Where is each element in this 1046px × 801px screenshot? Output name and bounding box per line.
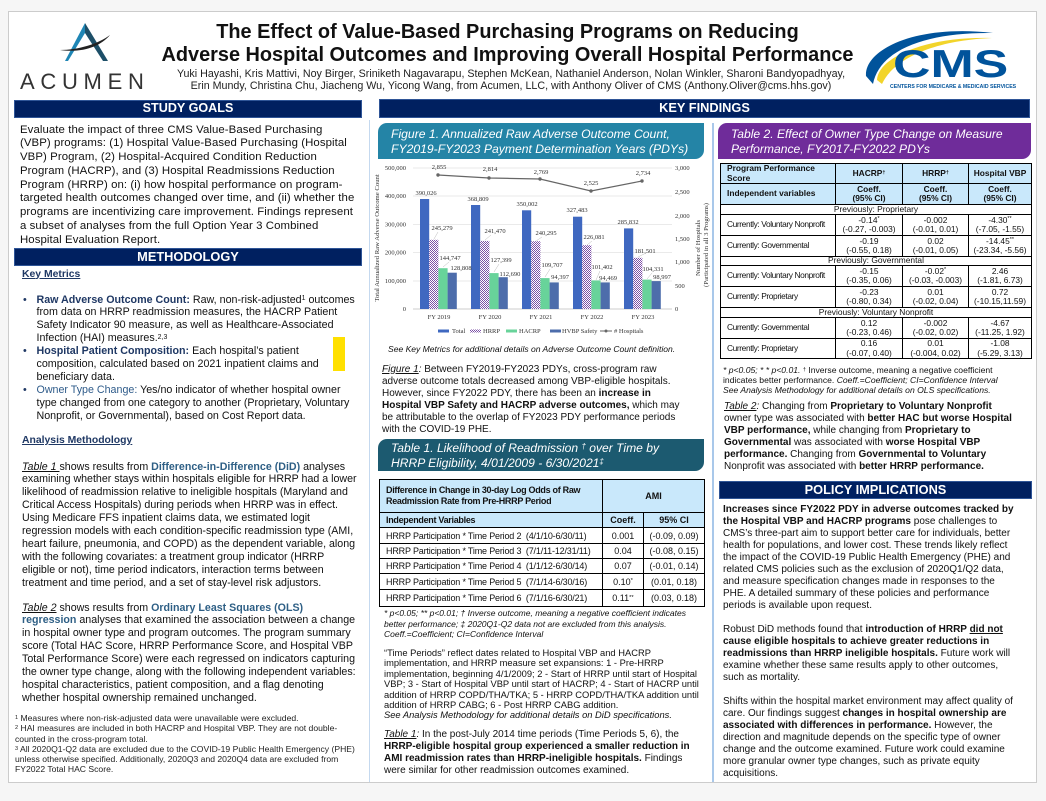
text: table 1 method [22,460,357,589]
text: figure 1 finding: However, since FY2022 PDY, there has been an increase in [382,388,651,398]
text: figure 1 finding: Hospital VBP Safety and HACRP adverse outcomes, which may [382,400,680,410]
table 1: readmission likelihood: HRRP Participation * Time Period 5 (7/1/14-6/30/16) [386,576,587,586]
chart: adverse outcome counts by year: 200,000 [385,250,406,256]
chart: adverse outcome counts by year: Total [452,328,465,335]
table 2: owner type change: 2.46 [992,266,1008,276]
text: table 1 method: with the following covariates: a treatment group indicator (HRRP [22,551,324,563]
table 2 notes [723,365,998,395]
table 1: readmission likelihood: Coeff. [610,515,636,525]
time periods note [384,648,699,720]
table 2: owner type change: Score [727,172,750,182]
chart: adverse outcome counts by year: FY 2023 [632,314,654,321]
table 1: readmission likelihood [379,479,705,607]
text: table 2 method: whether hospital ownership remained unchanged. [22,692,257,704]
text: table 1 method: Critical Access Hospitals) during periods when HRRP was in effect. [22,499,338,511]
heading: policy implications: POLICY IMPLICATIONS [805,482,946,497]
chart: adverse outcome counts by year: 400,000 [385,193,406,200]
text: table 2 finding: owner type was associated with better HAC but worse Hospital [724,413,1012,424]
text: table 2 method: regression analyses that examined the association between a change [22,614,355,626]
table 2: owner type change: Hospital VBP [974,168,1026,178]
chart: adverse outcome counts by year: FY 2019 [428,314,450,321]
text: table 1 finding: AMI readmission rates than HRRP-ineligible hospitals. Findings [384,752,682,764]
table 2: owner type change: -0.02* [925,266,946,276]
column rule right [712,123,714,782]
table 1: readmission likelihood: HRRP Participation * Time Period 2 (4/1/10-6/30/11) [386,530,586,540]
column rule left [369,120,370,782]
table 2: owner type change: -4.67 [990,318,1010,328]
chart: adverse outcome counts by year: 368,809 [467,196,489,203]
heading: methodology: METHODOLOGY [137,249,239,264]
text: policy implications: more granular owner type changes, such as private equity [723,756,980,766]
table 2: owner type change: Previously: Proprietary [834,204,918,214]
table 2: owner type change: Coeff. [857,184,881,194]
key metrics bullets: Safety Indicator 90 measure, as well as Healthcare-Associated [36,319,334,331]
table 2: owner type change: Currently: Voluntary Nonprofit [727,219,825,229]
table 1: readmission likelihood: (-0.09, 0.09) [649,530,699,540]
table 2: owner type change: 0.72 [992,287,1008,297]
text: study goals: Program (HRRP) on: (i) how hospital performance on program- [20,178,343,190]
heading: figure 1: Figure 1. Annualized Raw Adverse Outcome Count, [391,127,670,141]
table 1 notes [384,608,686,639]
footnotes: counted in the cross-program total. [15,734,148,744]
table 1: readmission likelihood: (-0.08, 0.15) [649,546,699,556]
text: policy implications: readmissions than HRRP ineligible hospitals. Future work will [723,648,1010,658]
text: figure 1 finding: adverse outcome totals decreased among VBP-eligible hospitals. [382,376,670,386]
title: Adverse Hospital Outcomes and Improving Overall Hospital Performance [162,44,853,66]
chart: adverse outcome counts by year: 2,855 [432,164,446,171]
table 2: owner type change: Coeff. [924,184,947,194]
table 2 notes: * p<0.05; * * p<0.01. † Inverse outcome, meaning a negative coefficient [723,365,993,375]
time periods note: addition of HRRP CABG; 6 - Post HRRP CABG addition. [384,700,618,710]
table 1: readmission likelihood: (-0.01, 0.14) [649,561,699,571]
time periods note: “Time Periods” reflect dates related to Hospital VBP and HACRP [384,648,651,658]
chart: adverse outcome counts by year: 109,707 [541,262,563,269]
table 2: owner type change: (-0.35, 0.06) [846,275,892,285]
chart: adverse outcome counts by year: 245,279 [431,225,453,232]
text: study goals: Program (HACRP), and (3) Hospital Readmissions Reduction [20,165,335,177]
text: table 1 method: heart failure, pneumonia, and COPD) as the dependent variable, along [22,538,355,550]
table 2: owner type change: Currently: Governmental [727,240,809,250]
text: table 2 method: Total Performance Score) were each regressed on indicators capturing [22,653,355,665]
table 1: readmission likelihood: Readmission Rate from Pre-HRRP Period [386,496,551,506]
table 2: owner type change: (-0.27, -0.003) [842,224,896,234]
text: table 1 method: treatment and time period, and a set of stay-level risk adjustors. [22,577,321,589]
table 1: readmission likelihood: 0.10* [613,576,633,586]
logo: CMS: CENTERS FOR MEDICARE & MEDICAID SERVICES [890,84,1016,90]
table 2 notes: See Analysis Methodology for additional details on OLS specifications. [723,385,991,395]
chart: adverse outcome counts by year: 2,769 [534,169,548,176]
table 2: owner type change: (-0.80, 0.34) [846,296,892,306]
table 2: owner type change: (95% CI) [983,193,1017,203]
heading: figure 1: FY2019-FY2023 Payment Determination Years (PDYs) [391,142,688,156]
table 2: owner type change: (-7.05, -1.55) [976,224,1024,234]
chart: adverse outcome counts by year [374,164,710,335]
heading: figure 1 [378,123,704,159]
text: policy implications: cause eligible hospitals to achieve greater reductions in [723,636,989,646]
table 1: readmission likelihood: HRRP Participation * Time Period 4 (1/1/12-6/30/14) [386,561,587,571]
table 2: owner type change: 0.12 [861,318,877,328]
chart: adverse outcome counts by year: Number of Hospitals [695,220,702,276]
time periods note: See Analysis Methodology for additional details on DiD specifications. [384,710,672,720]
text: policy implications: the impact of the COVID-19 Public Health Emergency (PHE) and [723,552,1010,562]
text: table 2 finding: Table 2: Changing from Proprietary to Voluntary Nonprofit [724,401,992,412]
logo: Acumen: ACUMEN [20,69,150,94]
key metrics bullets: beneficiary data. [36,371,115,383]
text: table 2 method: the owner type change, along with the following independent variables: [22,666,356,678]
key metrics bullets: Hospital Patient Composition: Each hospital’s patient [36,345,299,357]
table 2: owner type change: -0.23 [859,287,879,297]
chart: adverse outcome counts by year: 104,331 [642,266,664,273]
text: policy implications: direction and magnitude depends on the specific type of owner [723,732,1000,742]
table 2: owner type change: (-11.25, 1.92) [975,327,1025,337]
footnotes: 2 HAI measures are included in both HACRP and Hospital VBP. They are not double- [15,723,337,733]
time periods note: implementation, and HRRP measure set expansions: 1 - Pre-HRRP [384,658,664,668]
chart: adverse outcome counts by year: 94,397 [551,274,570,281]
chart: adverse outcome counts by year: 226,081 [583,234,605,241]
table 2: owner type change: Previously: Voluntary Nonprofit [819,308,933,317]
key metrics bullets: Nonprofit, or Governmental), based on Cost Report data. [36,410,306,422]
chart: adverse outcome counts by year: 241,470 [484,228,506,235]
key metrics bullets: • [23,294,27,306]
chart: adverse outcome counts by year: (Participated in all 3 Programs) [703,203,710,287]
text: table 1 method: Table 1 shows results from Difference-in-Difference (DiD) analyses [22,460,345,472]
table 1 notes: Coeff.=Coefficient; CI=Confidence Interval [384,629,543,639]
table 1: readmission likelihood: (0.03, 0.18) [651,593,697,603]
chart: adverse outcome counts by year: FY 2021 [530,314,552,321]
table 2: owner type change: Currently: Governmental [727,322,809,332]
text: policy implications: related CMS policies such as the exclusion of 2020Q1/Q2 data, [723,564,1004,574]
table 1: readmission likelihood: 0.04 [614,546,632,556]
table 2: owner type change: (-0.01, 0.01) [913,224,958,234]
authors: Erin Mundy, Christina Chu, Jiacheng Wu, Yicong Wang, from Acumen, LLC, with Anthony Oliver of CMS (Anthony.Oliver@cms.hhs.gov) [191,80,831,92]
heading: table 1: HRRP Eligibility, 4/01/2009 - 6/30/2021‡ [391,456,604,470]
key metrics bullets: from data on HRRP readmission measures, the HACRP Patient [36,306,337,318]
text: policy implications: change and the outcome examined. Future work could examine [723,744,1005,754]
table 2 notes: indicates better performance. Coeff.=Coefficient; CI=Confidence Interval [723,375,998,385]
footnotes: unless otherwise specified. Additionally, 2020Q3 and 2020Q4 data are excluded from [15,754,338,764]
heading: table 1: Table 1. Likelihood of Readmission † over Time by [391,441,659,455]
heading: table 1 [378,439,704,471]
chart: adverse outcome counts by year: 500 [675,283,685,290]
text: table 1 finding: HRRP-eligible hospital group experienced a smaller reduction in [384,740,690,752]
table 2: owner type change: -0.002 [924,215,947,225]
heading: study goals: STUDY GOALS [143,101,233,115]
key metrics bullets: • [23,384,27,396]
chart: adverse outcome counts by year: 112,690 [500,271,520,278]
table 2: owner type change: HACRP† [853,168,885,178]
chart: adverse outcome counts by year: FY 2022 [581,314,603,321]
chart: adverse outcome counts by year: 2,525 [584,180,598,187]
table 1: readmission likelihood: 95% CI [659,515,689,525]
subheading: analysis methodology: Analysis Methodology [22,435,132,446]
logo: Acumen [20,23,150,94]
heading: methodology [14,248,362,266]
text: table 2 finding: VBP performance, while changing from Proprietary to [724,425,971,436]
text: figure 1 finding: be attributable to the overlap of FY2023 PDY performance periods [382,412,675,422]
table 1: readmission likelihood: 0.11** [612,593,634,603]
text: table 1 method: Using Medicare FFS inpatient claims data, we estimated logit [22,512,310,524]
chart: adverse outcome counts by year: 500,000 [385,165,406,172]
table 2: owner type change: Coeff. [988,184,1012,194]
key metrics bullets: Raw Adverse Outcome Count: Raw, non-risk-adjusted1 outcomes [36,294,355,306]
text: policy implications: periods is available upon request. [723,600,872,610]
text: study goals: Evaluate the impact of three CMS Value-Based Purchasing [20,124,322,136]
key metrics bullets: • [23,345,27,357]
text: table 2 method [22,602,356,704]
table 2: owner type change: 0.01 [927,287,944,297]
table 2: owner type change: (-10.15,11.59) [974,296,1026,306]
chart: adverse outcome counts by year: 3,000 [675,165,690,172]
heading: table 2 [718,123,1031,159]
table 2: owner type change: (-1.81, 6.73) [977,275,1023,285]
table 2: owner type change: (95% CI) [919,193,952,203]
yellow highlight mark [333,337,345,371]
footnotes: FY2022 Total HAC Score. [15,764,113,774]
text: policy implications: PHE. A detailed summary of these policies and performance [723,588,989,598]
text: table 2 method: score (Total HAC Score, HRRP Performance Score, and Hospital VBP [22,640,353,652]
text: policy implications: and measure specification changes made in responses to the [723,576,995,586]
table 2: owner type change: Currently: Proprietary [727,343,798,353]
text: table 1 method: likelihood of readmission relative to ineligible hospitals (Maryland and [22,486,348,498]
table 1: readmission likelihood: HRRP Participation * Time Period 6 (7/1/16-6/30/21) [386,593,587,603]
time periods note: addition of HRRP COPD/THA/TKA; 5 - HRRP COPD/THA/TKA addition until [384,690,699,700]
text: study goals: VBP) Program, (2) Hospital-Acquired Condition Reduction [20,151,317,163]
table 1: readmission likelihood: Independent Variables [386,515,475,525]
chart: adverse outcome counts by year: 1,000 [675,259,690,266]
heading: key findings [379,99,1030,118]
heading: table 2: Performance, FY2017-FY2022 PDYs [731,142,930,156]
table 2: owner type change: -0.14* [858,215,880,225]
text: policy implications: CMS’s three-part aim to support better care for individuals, better [723,528,1010,538]
table 1: readmission likelihood: 0.001 [612,530,634,540]
authors: Yuki Hayashi, Kris Mattivi, Noy Birger, Sriniketh Nagavarapu, Stephen McKean, Nathaniel Anderson, Nolan Winkler, Sharoni Bandyopadhyay, [177,68,845,80]
footnotes: 3 All 2020Q1-Q2 data are excluded due to the COVID-19 Public Health Emergency (PHE) [15,744,355,754]
table 2: owner type change: (-0.004, 0.02) [910,348,961,358]
text: figure 1 finding: with the COVID-19 PHE. [382,424,491,434]
chart: adverse outcome counts by year: 2,734 [636,170,651,177]
table 1 notes: * p<0.05; ** p<0.01; † Inverse outcome, meaning a negative coefficient indicates [384,608,686,618]
text: study goals: targeted health outcomes changed over time, and (ii) whether the [20,192,354,204]
chart: adverse outcome counts by year: 2,814 [483,166,498,173]
key metrics bullets: Infection (HAI) measures.2,3 [36,332,167,344]
text: policy implications: the Hospital VBP and HACRP programs pose challenges to [723,516,997,526]
subheading: key metrics: Key Metrics [22,268,80,280]
text: table 1 method: eligible or not), time period indicators, interaction terms between [22,564,324,576]
chart: adverse outcome counts by year: HVBP Safety [562,328,598,335]
table 2: owner type change: (-0.02, 0.02) [913,327,958,337]
chart: adverse outcome counts by year: 285,832 [617,219,639,226]
table 1: readmission likelihood: HRRP Participation * Time Period 3 (7/1/11-12/31/11) [386,546,591,556]
title: The Effect of Value-Based Purchasing Programs on Reducing [216,21,799,43]
text: figure 1 finding: Figure 1: Between FY2019-FY2023 PDYs, cross-program raw [382,364,657,374]
table 1: readmission likelihood: (0.01, 0.18) [651,576,697,586]
chart: adverse outcome counts by year: 2,500 [675,189,690,196]
text: policy implications [723,504,1014,778]
table 2: owner type change [720,163,1032,359]
chart: adverse outcome counts by year: 100,000 [385,278,406,285]
chart: adverse outcome counts by year: 94,469 [599,275,617,282]
text: table 2 finding [724,401,1012,472]
footnotes: 1 Measures where non-risk-adjusted data were unavailable were excluded. [15,713,299,723]
chart: adverse outcome counts by year: 0 [403,306,406,313]
text: table 2 method: Table 2 shows results from Ordinary Least Squares (OLS) [22,602,303,614]
table 1: readmission likelihood: AMI [645,491,662,501]
table 2: owner type change: -14.45** [986,236,1014,246]
heading: table 2: Table 2. Effect of Owner Type Change on Measure [731,127,1003,141]
table 2: owner type change: HRRP† [922,168,949,178]
chart: adverse outcome counts by year: FY 2020 [479,314,501,321]
chart: adverse outcome counts by year: 101,402 [591,264,613,271]
logo: CMS: CMS [893,43,1008,86]
chart: adverse outcome counts by year: 327,483 [566,207,588,214]
chart: adverse outcome counts by year: 181,501 [634,248,656,255]
title [162,21,853,66]
text: study goals: a subset of analyses from the full Option Year 3 Combined [20,220,318,232]
table 2: owner type change: (-0.02, 0.04) [913,296,958,306]
text: table 2 finding: Governmental was associated with worse Hospital VBP [724,437,980,448]
key metrics bullets: Owner Type Change: Yes/no indicator of whether hospital owner [36,384,341,396]
time periods note: implementation, beginning 4/1/2009; 2 - Start of HRRP until start of Hospital [384,669,697,679]
chart: adverse outcome counts by year: 390,026 [415,190,437,197]
text: table 1 finding: Table 1: In the post-July 2014 time periods (Time Periods 5, 6), the [384,728,679,740]
text: policy implications: acquisitions. [723,768,778,778]
table 1: readmission likelihood: Difference in Change in 30-day Log Odds of Raw [386,485,580,495]
chart note: See Key Metrics for additional details on Adverse Outcome Count definition. [388,344,675,354]
table 2: owner type change: (95% CI) [852,193,886,203]
time periods note: VBP; 3 - Start of Hospital VBP until start of HACRP; 4 - Start of HACRP until [384,679,699,689]
table 2: owner type change: Independent variables [727,188,815,198]
table 2: owner type change: (-0.01, 0.05) [913,245,958,255]
table 2: owner type change: (-0.03, -0.003) [909,275,962,285]
chart: adverse outcome counts by year: 350,002 [516,201,538,208]
chart: adverse outcome counts by year: 128,808 [450,265,472,272]
chart: adverse outcome counts by year: 144,747 [439,255,461,262]
chart: adverse outcome counts by year: Total Annualized Raw Adverse Outcome Count [374,174,381,302]
heading: key findings: KEY FINDINGS [659,100,750,115]
chart: adverse outcome counts by year: HACRP [519,328,541,335]
logo: CMS [866,31,1016,90]
key metrics bullets: composition, calculated based on 2021 inpatient claims and [36,358,319,370]
table 2: owner type change: (-5.29, 3.13) [977,348,1023,358]
heading: policy implications [719,481,1032,498]
authors [177,68,845,92]
chart: adverse outcome counts by year: HRRP [483,328,500,335]
chart: adverse outcome counts by year: # Hospitals [614,328,644,335]
table 2: owner type change: Currently: Voluntary Nonprofit [727,270,825,280]
table 2: owner type change: (-23.34, -5.56) [973,245,1027,255]
text: table 1 method: regression models with each condition-specific readmission type (AMI, [22,525,353,537]
chart: adverse outcome counts by year: 2,000 [675,213,690,220]
table 2: owner type change: (-0.07, 0.40) [846,348,892,358]
text: table 1 finding [384,728,690,776]
text: table 1 finding: were similar for other readmission outcomes examined. [384,764,629,776]
chart: adverse outcome counts by year: 0 [675,306,678,313]
heading: study goals [14,100,362,118]
table 2: owner type change: (-0.55, 0.18) [846,245,892,255]
chart: adverse outcome counts by year: 1,500 [675,236,690,243]
chart: adverse outcome counts by year: 240,295 [535,230,557,237]
text: table 1 method: examining whether stays within hospitals eligible for HRRP had a lower [22,473,357,485]
text: policy implications: Shifts within the hospital market environment may affect quality of [723,696,1013,706]
chart: adverse outcome counts by year: 98,997 [653,274,672,281]
table 2: owner type change: -0.002 [924,318,947,328]
text: policy implications: health for populations, and lower cost. These trends likely reflect [723,540,1007,550]
text: policy implications: associated with differences in performance. However, the [723,720,993,730]
table 2: owner type change: Currently: Proprietary [727,291,798,301]
chart: adverse outcome counts by year: 300,000 [385,222,406,228]
table 1 notes: better performance; ‡ 2020Q1-Q2 data not are excluded from this analysis. [384,618,667,628]
text: policy implications: Increases since FY2022 PDY in adverse outcomes tracked by [723,504,1014,514]
text: policy implications: Robust DiD methods found that introduction of HRRP did not [723,624,1003,634]
text: study goals: (VBP) programs: (1) Hospital Value-Based Purchasing (Hospital [20,137,347,149]
text: policy implications: care. Our findings suggest changes in hospital ownership are [723,708,1006,718]
text: table 2 method: in hospital owner type and program outcomes. The program summary [22,627,351,639]
text: policy implications: such as mortality. [723,672,800,682]
text: study goals: Hospital Evaluation Report. [20,234,160,246]
text: figure 1 finding [382,364,680,434]
key metrics bullets: type changed from one category to another (Proprietary, Voluntary [36,397,349,409]
table 2: owner type change: (-0.23, 0.46) [846,327,892,337]
table 1: readmission likelihood: 0.07 [614,561,632,571]
key metrics bullets [23,294,355,422]
table 2: owner type change: -0.15 [859,266,879,276]
text: policy implications: examine whether these same results apply to other outcomes, [723,660,998,670]
table 2: owner type change: -4.30** [988,215,1012,225]
text: table 2 finding: Nonprofit was associated with better HRRP performance. [724,461,984,472]
table 2: owner type change: -0.19 [859,236,879,246]
chart: adverse outcome counts by year: 127,399 [490,257,512,264]
text: study goals: programs are incentivizing care improvement. Findings represent [20,206,353,218]
text: table 2 method: hospital characteristics, patient composition, and a flag denoting [22,679,324,691]
text: table 2 finding: performance. Changing from Governmental to Voluntary [724,449,986,460]
footnotes [15,713,355,774]
text: study goals [20,124,354,246]
table 2: owner type change: 0.02 [927,236,944,246]
